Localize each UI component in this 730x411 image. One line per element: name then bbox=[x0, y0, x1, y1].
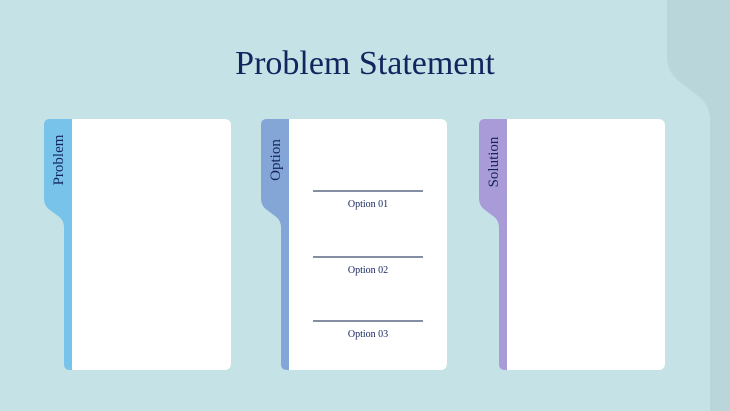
panel: option bbox=[261, 119, 447, 370]
title: Problem Statement bbox=[235, 45, 495, 82]
option 02 bbox=[313, 257, 423, 276]
tab label: solution: Solution bbox=[486, 136, 502, 187]
card body: option bbox=[286, 119, 447, 370]
option 02: Option 02 bbox=[348, 265, 388, 276]
background decoration: right side band bbox=[667, 0, 730, 411]
card body: solution bbox=[504, 119, 665, 370]
option 03: Option 03 bbox=[348, 329, 388, 340]
tab label: problem: Problem bbox=[51, 134, 67, 185]
option 01 bbox=[313, 191, 423, 210]
option 01: Option 01 bbox=[348, 199, 388, 210]
tab label: option: Option bbox=[268, 139, 284, 181]
card body: problem bbox=[70, 119, 231, 370]
tab: solution bbox=[479, 119, 507, 370]
panel: problem bbox=[44, 119, 231, 370]
tab: problem bbox=[44, 119, 72, 370]
panel: solution bbox=[479, 119, 665, 370]
option 03 bbox=[313, 321, 423, 340]
tab: option bbox=[261, 119, 289, 370]
